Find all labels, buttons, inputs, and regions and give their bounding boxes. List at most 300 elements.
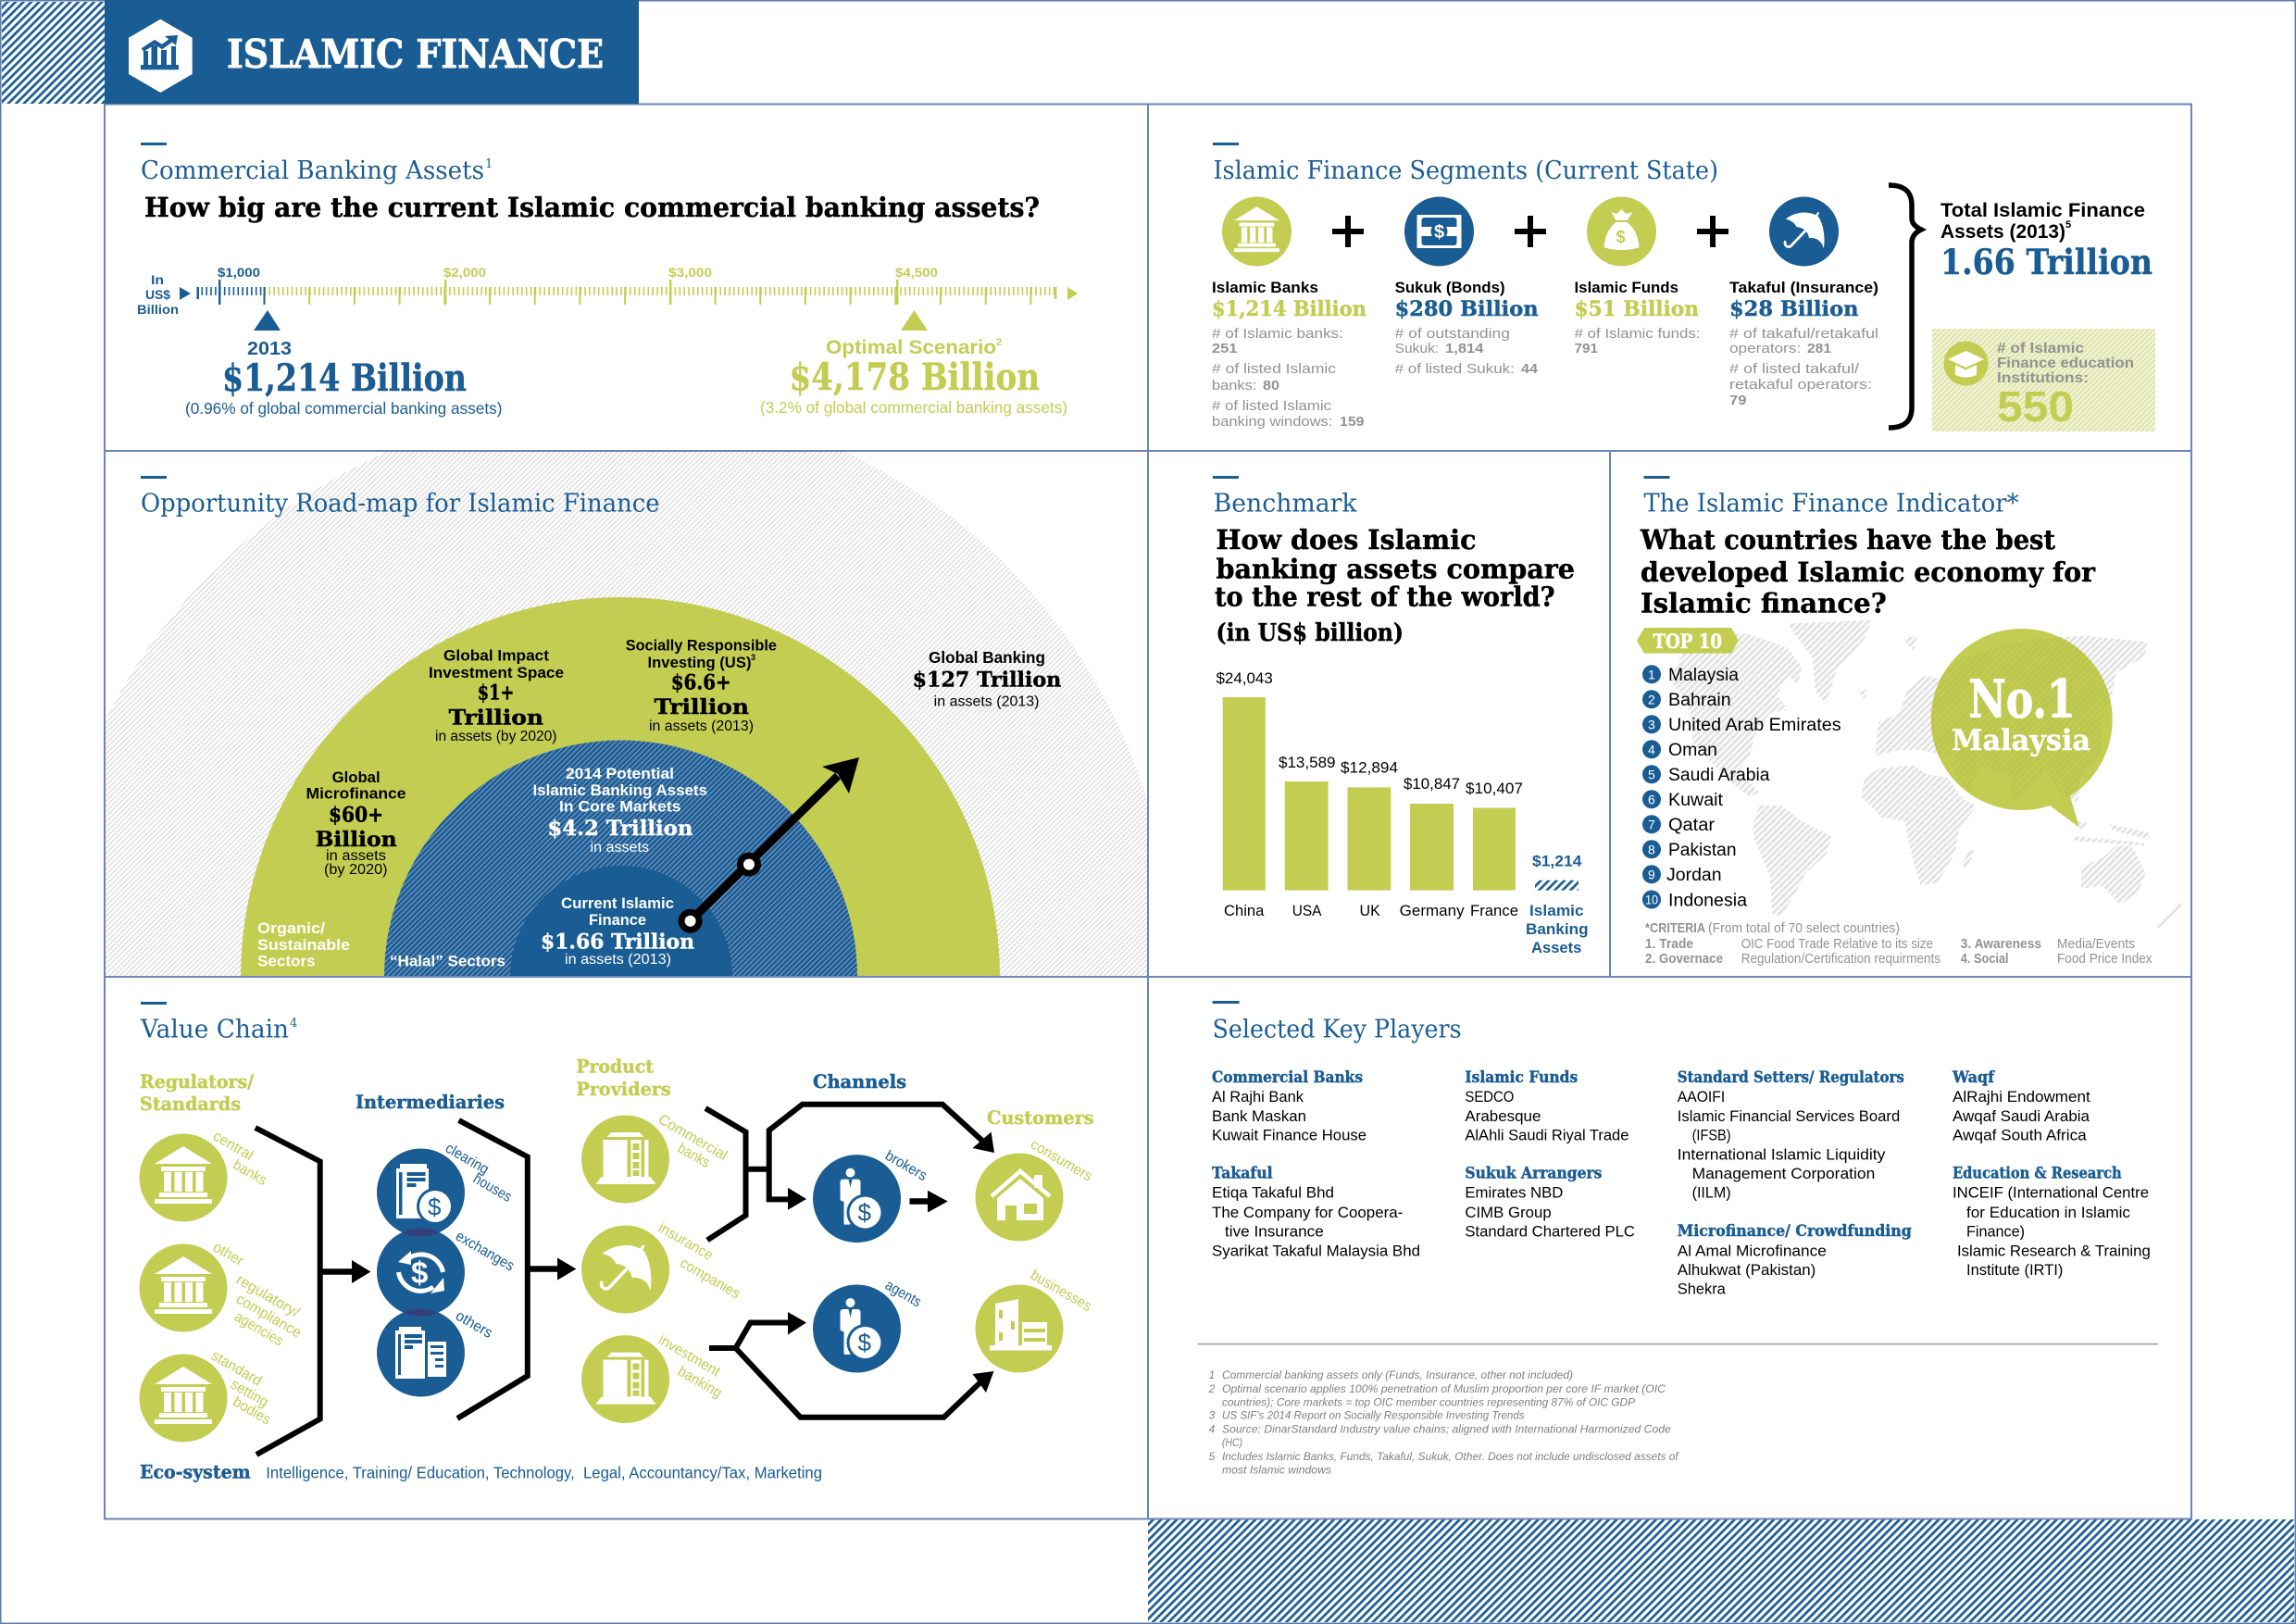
column: customers [976, 1106, 1095, 1372]
label: organic sectors [257, 920, 350, 970]
total assets: Assets (2013) [1940, 221, 2065, 243]
column: intermediaries [356, 1091, 517, 1396]
criteria table: (From total of 70 select countries) [1708, 920, 1900, 936]
icon: exchange cycle [398, 1251, 444, 1293]
footnote divider [1198, 1343, 2158, 1345]
arrow: growth path [679, 757, 859, 933]
column: regulators / standards: banks [230, 1157, 269, 1189]
label: current islamic finance: $1.66 Trillion [541, 930, 694, 954]
plus sign [1697, 216, 1728, 247]
section dash [1644, 476, 1670, 479]
criteria table [1645, 920, 2152, 967]
icon: sukuk bonds: $ [1434, 222, 1444, 243]
icon: exchange cycle: $ [411, 1255, 428, 1290]
ranked list: Indonesia [1668, 891, 1747, 910]
column 1: banks and takaful: Takaful [1212, 1164, 1273, 1181]
footnotes: 5 [1209, 1450, 1216, 1463]
column 1: banks and takaful [1212, 1068, 1420, 1259]
segment: islamic banks: # of listed Islamic [1212, 398, 1332, 414]
label: current islamic finance: Finance [589, 911, 646, 929]
ruler chart [137, 265, 1078, 317]
ranked list [1642, 665, 1841, 910]
segment: takaful: operators: [1729, 341, 1805, 356]
segment: takaful: 281 [1807, 341, 1831, 356]
footnotes: 4 [1209, 1423, 1216, 1436]
column: channels: $ [857, 1198, 872, 1226]
footnotes: Commercial banking assets only (Funds, Insurance, other not included) [1222, 1368, 1573, 1381]
column 3: regulators and microfinance: Al Amal Microfinance [1678, 1243, 1827, 1259]
callout: no.1 malaysia bubble [1930, 628, 2115, 828]
ranked list: Pakistan [1668, 841, 1737, 860]
bar chart: $1,214 [1532, 854, 1582, 870]
plus sign [1515, 216, 1546, 247]
criteria table: *CRITERIA [1645, 920, 1705, 936]
column: channels: $ [857, 1329, 872, 1356]
bar chart: Banking [1526, 921, 1589, 938]
column 4: waqf and education: Waqf [1952, 1068, 1995, 1086]
axis unit label: US$ [145, 287, 170, 302]
heading: Benchmark [1214, 489, 1357, 518]
marker: optimal scenario value [760, 310, 1067, 417]
footnotes [1208, 1368, 1679, 1476]
ranked list: 7 [1648, 817, 1655, 831]
total assets [1940, 200, 2152, 282]
ranked list: United Arab Emirates [1668, 716, 1841, 735]
marker: optimal scenario value: Optimal Scenario [826, 337, 996, 358]
question: How does Islamic [1217, 524, 1476, 556]
label: organic sectors: Sustainable [257, 937, 350, 954]
section dash [141, 143, 167, 145]
footnotes: Optimal scenario applies 100% penetration of Muslim proportion per core IF market (OIC [1222, 1382, 1666, 1395]
column 2: funds and sukuk: Sukuk Arrangers [1465, 1164, 1602, 1181]
column 1: banks and takaful: Al Rajhi Bank [1212, 1089, 1304, 1106]
icon: umbrella [1769, 196, 1839, 267]
bar chart: USA [1292, 903, 1321, 919]
question: Islamic finance? [1641, 588, 1887, 619]
question: to the rest of the world? [1215, 581, 1555, 612]
column 3: regulators and microfinance [1678, 1068, 1912, 1298]
segment: takaful: # of takaful/retakaful [1729, 326, 1878, 342]
column: regulators / standards: compliance [233, 1292, 304, 1342]
column: regulators / standards: agencies [231, 1309, 286, 1349]
label: current islamic finance [541, 894, 694, 968]
segment: islamic banks: banks: [1212, 378, 1261, 394]
label: global impact investment: Trillion [449, 706, 543, 731]
ruler chart: $4,500 [895, 265, 938, 280]
footnotes: most Islamic windows [1222, 1463, 1331, 1476]
callout: education institutions: # of Islamic [1997, 341, 2084, 356]
column 3: regulators and microfinance: Management Corporation [1692, 1166, 1875, 1182]
axis unit label [137, 272, 179, 317]
footnotes: 3 [1209, 1409, 1216, 1422]
panel: value chain [105, 977, 1148, 1518]
column 2: funds and sukuk: SEDCO [1465, 1089, 1515, 1106]
total assets: Total Islamic Finance [1940, 200, 2145, 221]
icon: hexagon with rising bar chart [129, 19, 193, 93]
question: How big are the current Islamic commercial banking assets? [144, 192, 1040, 223]
column: intermediaries: Intermediaries [356, 1091, 505, 1113]
bracket and arrow: regulators to intermediaries [256, 1128, 370, 1455]
column 3: regulators and microfinance: International Islamic Liquidity [1678, 1146, 1886, 1163]
heading: Value Chain [140, 1015, 289, 1044]
column 4: waqf and education [1952, 1068, 2151, 1279]
label: 2014 potential: In Core Markets [559, 798, 681, 815]
question [1640, 524, 2096, 619]
criteria table: 2. Governace [1645, 951, 1723, 967]
column 3: regulators and microfinance: (IFSB) [1692, 1128, 1731, 1144]
column: customers: consumers [1028, 1137, 1095, 1184]
segment: sukuk: 44 [1521, 361, 1539, 377]
column: product providers: banks [675, 1141, 713, 1171]
label: socially responsible investing: $6.6+ [671, 670, 731, 694]
segment: takaful: 79 [1729, 393, 1746, 408]
column 4: waqf and education: INCEIF (International Centre [1953, 1185, 2149, 1202]
section dash [1213, 476, 1239, 479]
segment: sukuk: Sukuk: [1395, 341, 1443, 356]
label: global impact investment: Global Impact [443, 647, 549, 665]
section dash [141, 476, 167, 479]
column: channels [813, 1070, 930, 1372]
label: socially responsible investing: Socially Responsible [626, 637, 777, 655]
label: 2014 potential: 2014 Potential [566, 765, 674, 782]
panel: opportunity road-map [106, 452, 1147, 976]
icon: money bag: $ [1616, 228, 1626, 246]
ranked list: Kuwait [1668, 791, 1724, 810]
segment: sukuk [1395, 279, 1539, 377]
segment: islamic banks: banking windows: [1212, 414, 1337, 430]
label: socially responsible investing: Investing (US) [648, 654, 752, 671]
eco-system line: Intelligence, Training/ Education, Technology, Legal, Accountancy/Tax, Marketing [266, 1463, 822, 1481]
label: global impact investment: $1+ [478, 681, 514, 706]
panel: islamic finance indicator [1637, 476, 2181, 966]
column 2: funds and sukuk: Emirates NBD [1465, 1185, 1563, 1202]
column 2: funds and sukuk: AlAhli Saudi Riyal Trade [1465, 1128, 1628, 1144]
column 3: regulators and microfinance: AAOIFI [1678, 1089, 1725, 1106]
column 1: banks and takaful: Bank Maskan [1212, 1108, 1306, 1125]
ranked list: 5 [1648, 767, 1655, 781]
segment: islamic funds: $51 Billion [1574, 297, 1699, 321]
column 1: banks and takaful: Commercial Banks [1212, 1068, 1363, 1086]
label: socially responsible investing: Trillion [655, 695, 749, 719]
question: (in US$ billion) [1217, 619, 1404, 647]
criteria table: 3. Awareness [1961, 936, 2041, 952]
label: global impact investment: Investment Space [429, 664, 564, 681]
header banner [105, 0, 639, 104]
bar chart: $24,043 [1217, 670, 1273, 687]
icon: house [992, 1171, 1050, 1220]
axis unit label: Billion [137, 302, 179, 317]
column: product providers: insurance [655, 1220, 716, 1264]
icon: money bag [1587, 196, 1656, 267]
bar chart: Assets [1531, 940, 1581, 956]
column: channels: brokers [882, 1148, 930, 1184]
question: developed Islamic economy for [1641, 556, 2096, 588]
marker: optimal scenario value: $4,178 Billion [789, 356, 1040, 399]
icon: graduation cap [1944, 341, 1989, 385]
panel: benchmark [1148, 451, 1610, 977]
label: organic sectors: Sectors [257, 954, 316, 970]
ranked list: 10 [1645, 893, 1658, 907]
label: global banking: Global Banking [929, 648, 1045, 667]
ranked list: Qatar [1668, 816, 1716, 835]
footnotes: US SIF's 2014 Report on Socially Responsible Investing Trends [1222, 1409, 1525, 1422]
column: product providers: Product [576, 1056, 655, 1078]
footnotes: Source: DinarStandard Industry value chains; aligned with International Harmonized Code [1222, 1423, 1671, 1436]
panel: selected key players [1148, 977, 2191, 1518]
icon: buildings [395, 1327, 446, 1379]
callout: no.1 malaysia bubble: No.1 [1968, 669, 2076, 731]
column: intermediaries: houses [470, 1171, 514, 1206]
label: global impact investment: in assets (by 2020) [435, 729, 557, 744]
heading: Selected Key Players [1213, 1016, 1462, 1044]
segment: takaful [1729, 279, 1878, 408]
panel frame lines [105, 104, 2191, 1518]
segment: islamic banks: 80 [1263, 378, 1279, 394]
bar chart: UK [1359, 903, 1380, 919]
segment: islamic funds: 791 [1574, 341, 1598, 356]
icon: islamic banks [1222, 196, 1292, 267]
column 3: regulators and microfinance: Microfinance/ Crowdfunding [1678, 1222, 1912, 1240]
marker: 2013 value: $1,214 Billion [222, 356, 467, 400]
segment: islamic banks: # of Islamic banks: [1212, 326, 1343, 342]
label: current islamic finance: Current Islamic [561, 894, 674, 912]
column 2: funds and sukuk [1465, 1068, 1635, 1241]
ranked list: 9 [1648, 867, 1655, 881]
column: channels: Channels [813, 1070, 906, 1093]
segment: islamic banks: 159 [1340, 414, 1365, 430]
column 4: waqf and education: Institute (IRTI) [1966, 1262, 2063, 1279]
column 4: waqf and education: AlRajhi Endowment [1953, 1089, 2090, 1106]
segment: islamic banks: 251 [1212, 341, 1237, 356]
footnotes: Includes Islamic Banks, Funds, Takaful, Sukuk, Other. Does not include undisclosed assets of [1222, 1450, 1679, 1463]
column: regulators / standards: Regulators/ [140, 1070, 255, 1093]
column 3: regulators and microfinance: Shekra [1678, 1281, 1727, 1298]
segment: sukuk: $280 Billion [1395, 297, 1539, 321]
column: product providers [576, 1056, 742, 1423]
footnotes: 2 [1208, 1382, 1216, 1395]
arrow: brokers to consumers [909, 1191, 948, 1213]
bar chart: Islamic [1529, 903, 1584, 919]
heading: 1 [485, 157, 493, 171]
column 2: funds and sukuk: CIMB Group [1465, 1205, 1552, 1221]
column 2: funds and sukuk: Islamic Funds [1465, 1068, 1578, 1086]
column 2: funds and sukuk: Standard Chartered PLC [1465, 1224, 1635, 1241]
heading: Opportunity Road-map for Islamic Finance [141, 489, 659, 518]
total assets: 5 [2065, 219, 2071, 231]
segment: takaful: # of listed takaful/ [1729, 361, 1860, 377]
column: regulators / standards: setting [228, 1377, 271, 1410]
label: global microfinance: (by 2020) [324, 862, 387, 878]
axis unit label: In [151, 272, 164, 287]
bracket and arrow: intermediaries to providers [457, 1120, 576, 1418]
bar chart: Germany [1400, 903, 1465, 919]
column 4: waqf and education: Finance) [1966, 1224, 2025, 1241]
label: 2014 potential: Islamic Banking Assets [533, 781, 707, 799]
segment: islamic funds: Islamic Funds [1574, 279, 1678, 296]
marker: 2013 value: 2013 [247, 339, 292, 359]
column 1: banks and takaful: tive Insurance [1225, 1224, 1324, 1241]
column: regulators / standards: Standards [140, 1093, 241, 1115]
question: What countries have the best [1640, 524, 2056, 556]
bar chart: France [1470, 903, 1518, 919]
column: intermediaries: others [453, 1308, 495, 1342]
total assets: 1.66 Trillion [1940, 242, 2152, 282]
label: global microfinance: Billion [316, 828, 397, 852]
marker: 2013 value: (0.96% of global commercial banking assets) [185, 399, 502, 418]
column 1: banks and takaful: Etiqa Takaful Bhd [1212, 1185, 1334, 1202]
column: product providers: investment [655, 1332, 723, 1380]
marker: optimal scenario value: (3.2% of global commercial banking assets) [760, 398, 1067, 417]
heading: Commercial Banking Assets [141, 156, 484, 185]
column: intermediaries: exchanges [453, 1229, 517, 1274]
segment: sukuk: Sukuk (Bonds) [1395, 279, 1505, 296]
criteria table: Media/Events [2057, 936, 2135, 952]
callout: education institutions: Finance education [1997, 356, 2134, 371]
section dash [141, 1002, 167, 1005]
column: product providers: banking [675, 1364, 725, 1401]
segment: sukuk: 1,814 [1445, 341, 1484, 356]
criteria table: 1. Trade [1645, 936, 1693, 952]
ranked list: Saudi Arabia [1668, 766, 1770, 785]
ranked list: 8 [1648, 843, 1655, 857]
label: global microfinance: Global [332, 768, 381, 786]
callout: education institutions [1932, 329, 2155, 431]
criteria table: Food Price Index [2057, 951, 2152, 967]
label: 2014 potential: $4.2 Trillion [547, 817, 693, 841]
label: organic sectors: Organic/ [257, 920, 325, 937]
section dash [1213, 1001, 1240, 1004]
section dash [1213, 143, 1239, 145]
column: product providers: Commercial [655, 1112, 730, 1164]
column 3: regulators and microfinance: Islamic Financial Services Board [1678, 1108, 1900, 1125]
column: customers: businesses [1028, 1268, 1094, 1315]
column 4: waqf and education: Education & Research [1953, 1164, 2122, 1181]
heading: The Islamic Finance Indicator* [1644, 489, 2019, 518]
label: socially responsible investing: in assets (2013) [649, 718, 754, 734]
segment: islamic banks: # of listed Islamic [1212, 361, 1337, 377]
connector: providers to channels and customers (lower) [709, 1312, 994, 1418]
ranked list: Malaysia [1668, 666, 1739, 685]
column 4: waqf and education: for Education in Islamic [1966, 1205, 2130, 1221]
bar chart: China [1224, 903, 1265, 919]
panel: commercial banking assets [105, 105, 1148, 451]
world map [1648, 620, 2190, 935]
ranked list: Bahrain [1668, 691, 1731, 710]
segment: islamic funds [1574, 279, 1700, 356]
icon: business buildings [990, 1299, 1052, 1350]
label: global microfinance [306, 768, 406, 878]
criteria table: OIC Food Trade Relative to its size [1741, 936, 1933, 952]
label: global microfinance: $60+ [329, 804, 383, 828]
heading: Islamic Finance Segments (Current State) [1213, 156, 1718, 185]
column: regulators / standards: bodies [230, 1394, 273, 1428]
icon: building with coin: $ [428, 1193, 442, 1220]
marker: 2013 value [185, 310, 502, 418]
hatch corner: top-left [2, 2, 105, 104]
connector: providers to channels and customers (upper) [705, 1105, 994, 1240]
bar chart [1217, 670, 1589, 956]
label: global banking [913, 648, 1061, 710]
column 1: banks and takaful: Syarikat Takaful Malaysia Bhd [1212, 1243, 1420, 1259]
eco-system line: Eco-system [140, 1461, 251, 1483]
callout: education institutions: 550 [1997, 382, 2074, 431]
segment: islamic funds: # of Islamic funds: [1574, 326, 1700, 342]
label: global impact investment [429, 647, 564, 744]
column 3: regulators and microfinance: Standard Setters/ Regulators [1678, 1068, 1904, 1086]
label: global microfinance: in assets [326, 848, 386, 864]
column 1: banks and takaful: Kuwait Finance House [1212, 1128, 1366, 1144]
ranked list: 4 [1648, 743, 1655, 757]
column 3: regulators and microfinance: Alhukwat (Pakistan) [1678, 1262, 1816, 1279]
bar chart: $10,847 [1404, 776, 1460, 793]
column 1: banks and takaful: The Company for Coopera- [1212, 1205, 1403, 1221]
callout: education institutions: Institutions: [1997, 370, 2089, 386]
question [1215, 524, 1575, 647]
marker: optimal scenario value: 2 [996, 337, 1002, 348]
bar chart: $12,894 [1341, 760, 1398, 777]
label: 2014 potential [533, 765, 707, 856]
brace [1889, 185, 1921, 428]
label: socially responsible investing: 3 [751, 653, 755, 662]
ruler chart: $3,000 [668, 265, 712, 280]
label: current islamic finance: in assets (2013) [565, 952, 671, 968]
segment: takaful: $28 Billion [1729, 297, 1859, 321]
segment: islamic banks: Islamic Banks [1212, 279, 1318, 296]
column: regulators / standards [139, 1070, 304, 1443]
footnotes: (HC) [1222, 1436, 1242, 1449]
segment: sukuk: # of listed Sukuk: [1395, 361, 1519, 377]
hatch band: bottom-right [1148, 1519, 2294, 1622]
ruler chart: $2,000 [443, 265, 486, 280]
callout: no.1 malaysia bubble: Malaysia [1952, 724, 2090, 757]
label: socially responsible investing [626, 637, 777, 734]
plus sign [1332, 216, 1364, 247]
icon: building with coin [396, 1164, 454, 1225]
ranked list: 1 [1648, 667, 1655, 681]
ranked list: Jordan [1666, 866, 1722, 885]
bar chart: $10,407 [1466, 781, 1523, 797]
column: regulators / standards: central [210, 1129, 256, 1164]
criteria table: 4. Social [1961, 951, 2009, 967]
bar chart: $13,589 [1279, 755, 1335, 771]
column: channels: agents [882, 1278, 924, 1310]
footnotes: countries); Core markets = top OIC member countries representing 87% of OIC GDP [1222, 1395, 1635, 1408]
panel: islamic finance segments [1148, 105, 2191, 451]
heading: 4 [290, 1017, 297, 1031]
title: ISLAMIC FINANCE [227, 31, 604, 77]
column: regulators / standards: regulatory/ [233, 1272, 303, 1321]
eco-system line [140, 1461, 822, 1483]
column 2: funds and sukuk: Arabesque [1465, 1108, 1541, 1125]
ranked list: Oman [1668, 741, 1717, 760]
segment: islamic banks [1212, 279, 1366, 430]
column: regulators / standards: standard [208, 1348, 264, 1389]
label: halal sectors: “Halal” Sectors [390, 954, 505, 970]
column: customers: Customers [987, 1106, 1094, 1129]
question: banking assets compare [1217, 554, 1575, 585]
ruler chart: $1,000 [218, 265, 260, 280]
column: regulators / standards: other [210, 1240, 246, 1269]
chart: concentric opportunity domes [106, 452, 1147, 976]
ranked list: 6 [1648, 793, 1655, 807]
footnotes: 1 [1209, 1368, 1215, 1381]
tag: top 10: TOP 10 [1653, 630, 1722, 653]
segment: islamic banks: $1,214 Billion [1212, 297, 1366, 321]
column: product providers: Providers [576, 1078, 671, 1100]
criteria table: Regulation/Certification requirments [1741, 951, 1940, 967]
label: global banking: in assets (2013) [934, 694, 1039, 710]
column: intermediaries: clearing [443, 1141, 492, 1178]
